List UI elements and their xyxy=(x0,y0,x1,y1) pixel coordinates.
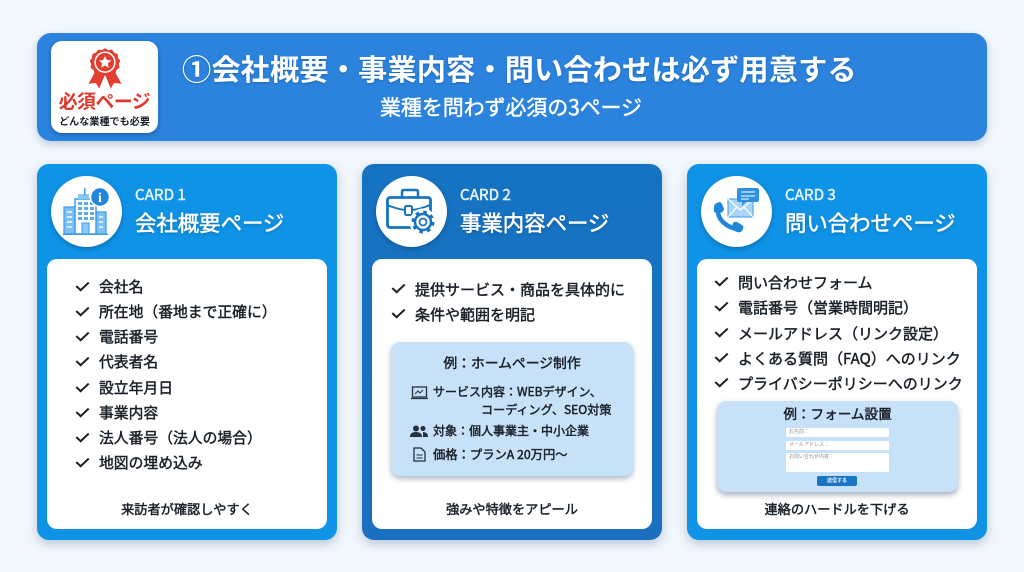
badge subtitle: どんな業種でも必要 xyxy=(59,113,150,128)
example box: form xyxy=(717,401,958,492)
checklist: 電話番号（営業時間明記） xyxy=(738,297,918,318)
card 3 footer note: 連絡のハードルを下げる xyxy=(764,499,910,518)
price text: 価格：プランA 20万円～ xyxy=(433,445,568,463)
form field: email: メールアドレス： xyxy=(789,442,829,448)
card 2 footer note: 強みや特徴をアピール xyxy=(446,499,578,518)
checklist: 事業内容 xyxy=(99,402,158,423)
panel: card 2 business content xyxy=(362,164,662,540)
service text: サービス内容：WEBデザイン、 xyxy=(433,383,602,400)
checklist: 問い合わせフォーム xyxy=(738,272,873,293)
checklist: 地図の埋め込み xyxy=(99,452,203,473)
checklist: 設立年月日 xyxy=(99,377,173,398)
badge title: 必須ページ xyxy=(59,87,150,114)
card 2 label: CARD 2 xyxy=(460,183,511,205)
submit button: 送信する xyxy=(827,478,847,484)
card 1 heading: 会社概要ページ xyxy=(135,207,284,238)
icon: people xyxy=(410,426,428,437)
panel: card 1 company overview xyxy=(37,164,337,540)
example heading: 例：ホームページ制作 xyxy=(443,352,581,372)
icon: office building: i xyxy=(98,191,102,206)
card 2 heading: 事業内容ページ xyxy=(460,207,609,238)
card 2 content xyxy=(372,259,652,529)
icon: office building xyxy=(51,176,122,247)
icon: briefcase with gear xyxy=(376,176,447,247)
example box: homepage production: コーディング、SEO対策 xyxy=(481,401,611,418)
example box: homepage production xyxy=(391,342,633,476)
badge: required pages xyxy=(51,41,158,133)
checklist: 電話番号 xyxy=(99,326,158,347)
checklist: 所在地（番地まで正確に） xyxy=(99,301,277,322)
form field: message: お問い合わせ内容： xyxy=(789,454,834,460)
subtitle: 業種を問わず必須の3ページ xyxy=(380,92,642,122)
example heading: 例：フォーム設置 xyxy=(783,403,892,423)
card 1 footer note: 来訪者が確認しやすく xyxy=(121,499,253,518)
card 3 content xyxy=(697,259,977,529)
icon: laptop chart xyxy=(411,386,428,400)
icon: document xyxy=(413,447,426,462)
checklist: 代表者名 xyxy=(99,351,158,372)
checklist: メールアドレス（リンク設定） xyxy=(738,323,948,344)
form field: name: お名前： xyxy=(789,429,809,435)
checklist: プライバシーポリシーへのリンク xyxy=(738,373,963,394)
card 3 heading: 問い合わせページ xyxy=(785,207,956,238)
checklist: 法人番号（法人の場合） xyxy=(99,427,262,448)
checklist xyxy=(714,272,963,394)
card 3 label: CARD 3 xyxy=(785,183,836,205)
checklist: 会社名 xyxy=(99,276,143,297)
title: ①会社概要・事業内容・問い合わせは必ず用意する xyxy=(182,47,857,89)
icon: award rosette xyxy=(88,48,122,88)
card 1 label: CARD 1 xyxy=(135,183,186,205)
checklist: よくある質問（FAQ）へのリンク xyxy=(738,348,961,369)
icon: phone and mail xyxy=(701,176,772,247)
form field: message xyxy=(786,453,889,472)
checklist: 条件や範囲を明記 xyxy=(415,304,535,325)
form field: email xyxy=(786,441,889,450)
checklist xyxy=(392,279,625,325)
card 1 content xyxy=(47,259,327,529)
panel: card 3 contact xyxy=(687,164,987,540)
submit button xyxy=(817,476,857,486)
form field: name xyxy=(786,428,889,437)
checklist xyxy=(76,276,277,473)
target text: 対象：個人事業主・中小企業 xyxy=(433,422,589,439)
header banner xyxy=(37,33,987,141)
checklist: 提供サービス・商品を具体的に xyxy=(415,279,625,300)
